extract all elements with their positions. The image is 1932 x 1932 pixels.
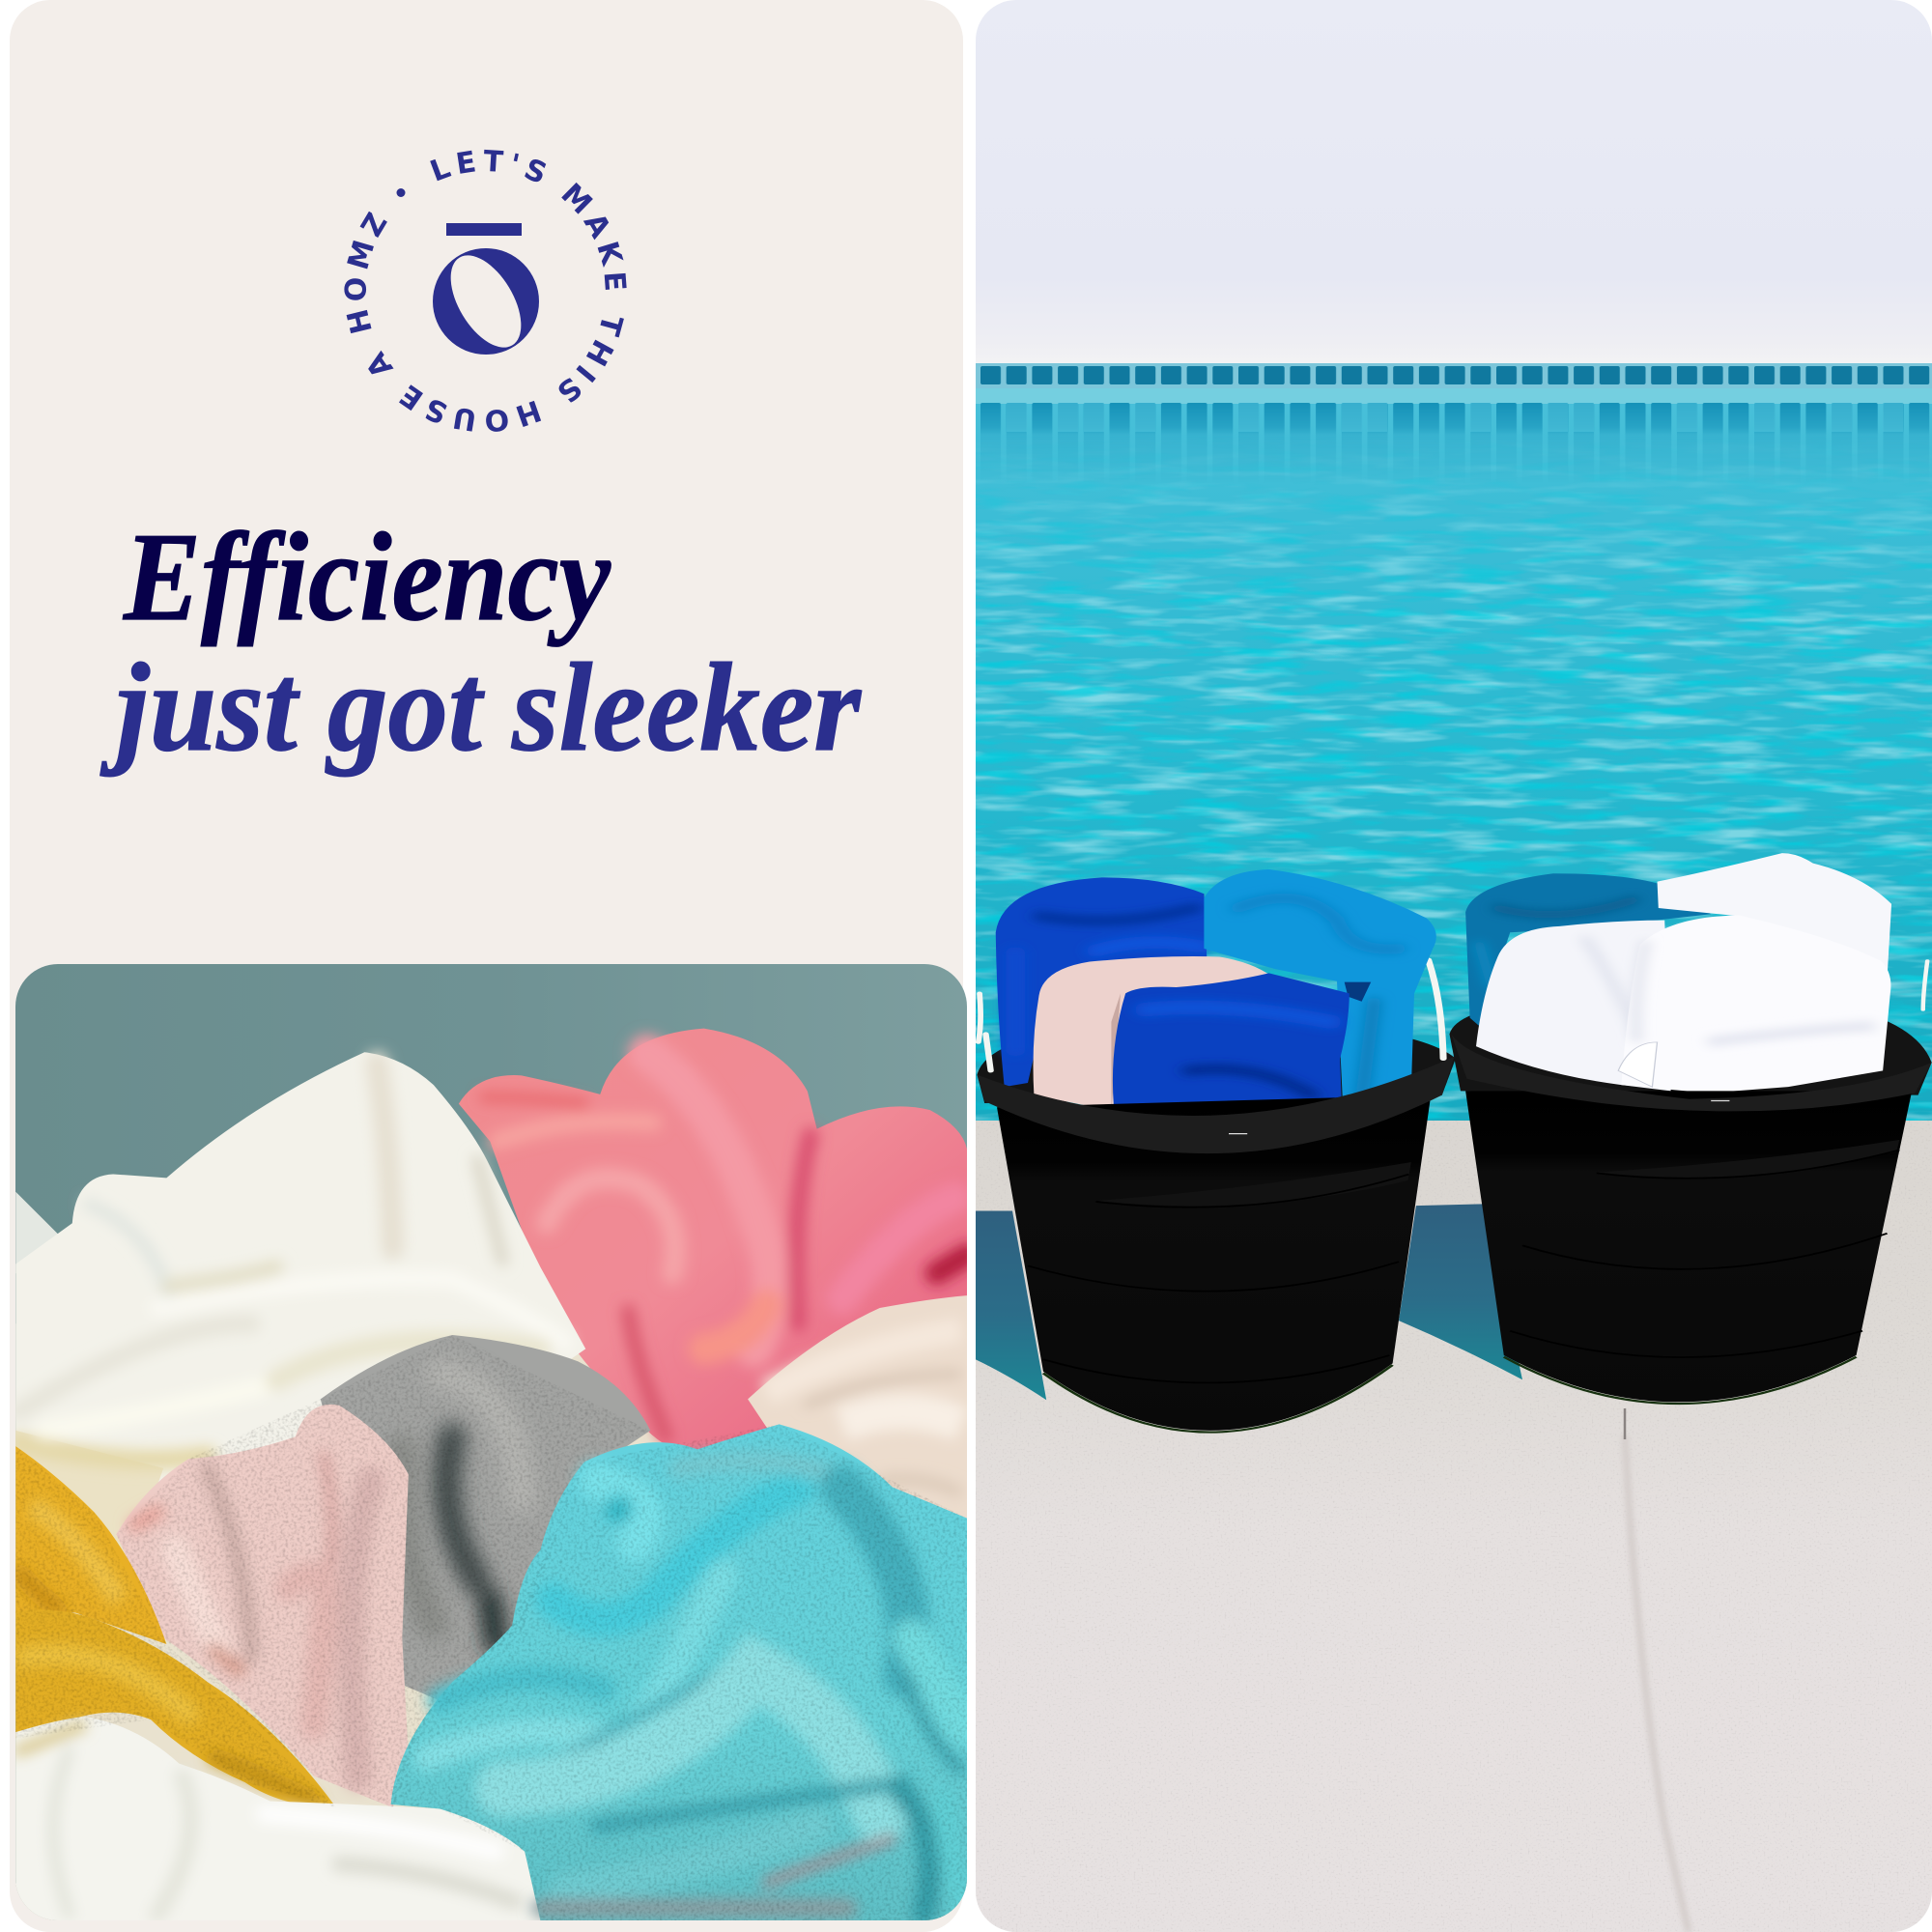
fabric base under the pile xyxy=(15,1323,968,1920)
rope handles xyxy=(979,960,1927,1070)
separator dot xyxy=(396,188,406,197)
white rolled towel back xyxy=(1658,853,1891,978)
yellow towel lower xyxy=(15,1609,336,1807)
white cloth lower xyxy=(15,1717,540,1920)
bucket right xyxy=(1451,1034,1932,1404)
panel: photo of pile of colourful towels xyxy=(15,964,968,1920)
cream sherpa towel xyxy=(748,1295,968,1524)
royal blue rolled towel xyxy=(996,877,1208,1087)
deck shadows xyxy=(976,1204,1522,1400)
towels in left bucket xyxy=(996,869,1436,1120)
white cloth xyxy=(15,1052,585,1638)
white rolled towel front left xyxy=(1476,921,1671,1091)
pink towel xyxy=(459,1029,968,1462)
teal rolled towel xyxy=(1465,873,1711,1026)
yellow towel upper xyxy=(15,1446,166,1644)
teal towel xyxy=(391,1424,968,1920)
bucket left xyxy=(978,1057,1455,1433)
towels in right bucket xyxy=(1465,853,1891,1093)
panel: cream brand card xyxy=(10,0,963,1932)
bucket right back rim xyxy=(1449,1016,1932,1095)
white rolled towel front right xyxy=(1621,916,1890,1093)
heading: line two: just got sleeker xyxy=(99,638,862,778)
towel fibre texture xyxy=(15,1335,968,1920)
bucket left back rim xyxy=(978,1039,1455,1103)
wall xyxy=(976,0,1932,367)
pink rolled towel xyxy=(1034,956,1277,1111)
light blue rolled towel xyxy=(1204,869,1436,1111)
heading: line one: Efficiency xyxy=(123,507,611,647)
logo mark ring xyxy=(433,243,539,359)
pale pink towel xyxy=(116,1405,409,1807)
logo mark bar xyxy=(446,223,522,236)
circular slogan text: LET'S MAKE THIS HOUSE A HOMZ xyxy=(344,149,627,432)
pool deck xyxy=(976,1121,1932,1932)
pool water xyxy=(976,363,1932,1140)
panel: photo of towel buckets by the pool xyxy=(976,0,1932,1932)
royal blue front towel xyxy=(1113,973,1350,1120)
grey towel xyxy=(321,1335,650,1701)
pool tile rows xyxy=(976,363,1932,456)
logo: circular badge xyxy=(344,149,627,432)
